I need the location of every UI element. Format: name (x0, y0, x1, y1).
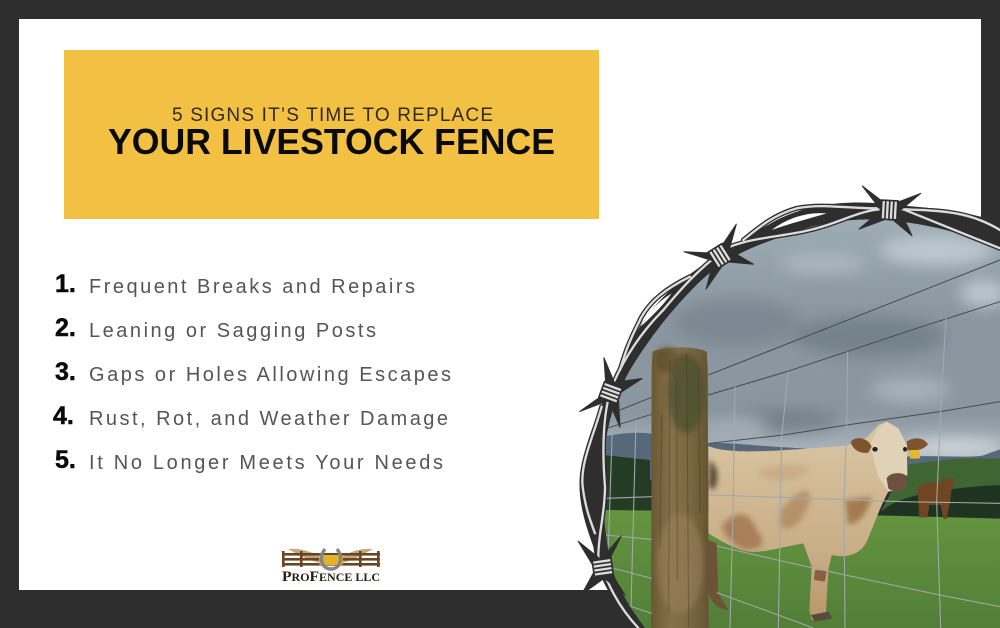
barb: left (579, 356, 644, 429)
logo: ProFence LLC (282, 549, 380, 585)
sign 3: 3. (55, 358, 76, 386)
list of five signs (53, 270, 451, 474)
white gaps between strands (641, 213, 827, 327)
sign 2: 2. (55, 314, 76, 342)
hoof (811, 612, 832, 622)
ear tag (910, 450, 920, 459)
distant hills (603, 433, 1000, 480)
grass (603, 510, 1000, 628)
sign 1: Frequent Breaks and Repairs (89, 276, 415, 298)
barb: upper left (683, 221, 759, 292)
sign 3: Gaps or Holes Allowing Escapes (89, 364, 451, 386)
barbed wire dark band (579, 203, 1000, 628)
ears (851, 438, 872, 453)
main cow (707, 422, 928, 622)
trees (881, 458, 1000, 512)
fence wires (607, 260, 1000, 443)
sign 4: Rust, Rot, and Weather Damage (89, 408, 448, 430)
cattle photo (590, 213, 1000, 628)
barb: lower left (574, 535, 629, 601)
photo with barbed wire frame (coordinates in 3x crop space) (574, 186, 1000, 628)
sign 5: 5. (55, 446, 76, 474)
sign 5: It No Longer Meets Your Needs (89, 452, 443, 474)
wire strands (582, 206, 1000, 628)
muzzle (887, 473, 907, 491)
sky (590, 213, 1000, 463)
title line one: 5 SIGNS IT’S TIME TO REPLACE (172, 105, 493, 126)
sign 1: 1. (55, 270, 76, 298)
wooden post (651, 347, 709, 628)
sign 4: 4. (53, 402, 74, 430)
distant brown cow (917, 478, 956, 519)
title line two: YOUR LIVESTOCK FENCE (108, 121, 555, 162)
clouds (673, 235, 1000, 454)
barb: top right (859, 186, 921, 236)
logo: ProFence LLC: PROFENCE LLC (282, 569, 380, 585)
sign 2: Leaning or Sagging Posts (89, 320, 376, 342)
eyes (872, 447, 878, 452)
title banner (64, 50, 599, 219)
